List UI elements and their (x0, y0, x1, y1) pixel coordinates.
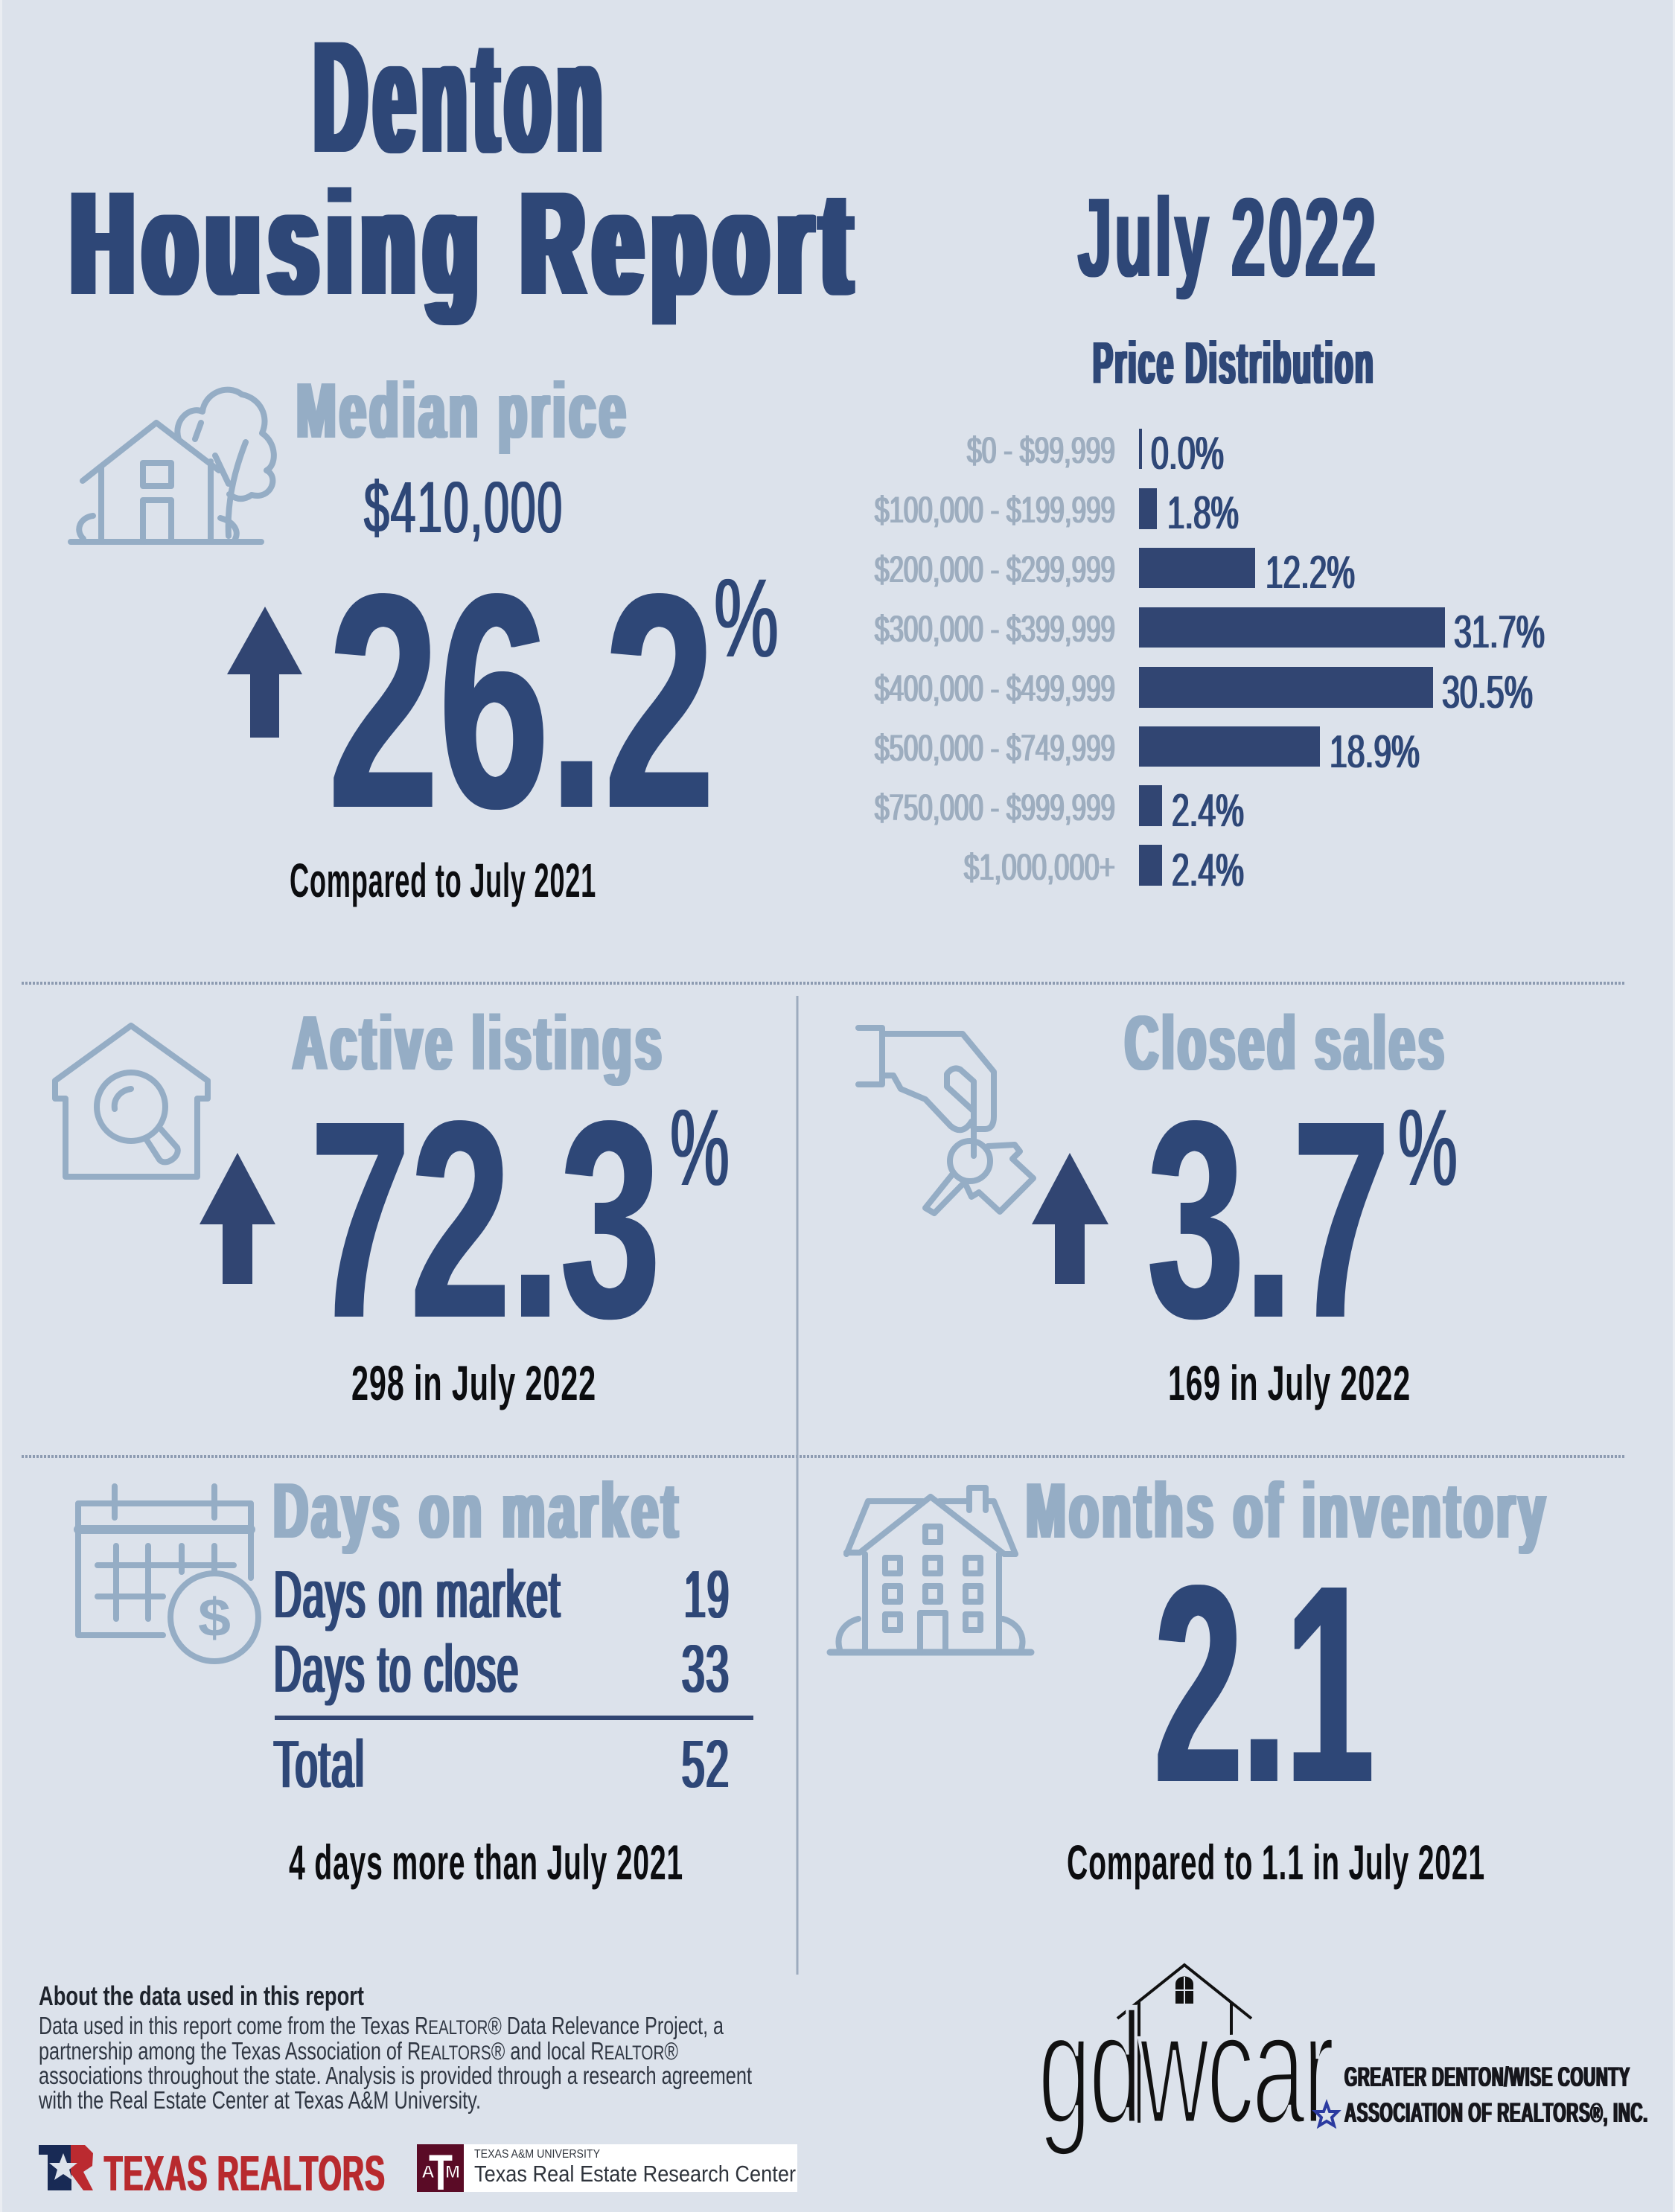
change value: 3.7 (1147, 1063, 1390, 1377)
inventory value: 2.1 (1155, 1527, 1374, 1841)
coin dollar sign: $ (198, 1588, 231, 1648)
change value: 72.3 (310, 1063, 660, 1377)
about the data note: Data used in this report come from the Texas REALTOR® Data Relevance Project, a (39, 2012, 724, 2039)
heading: Median price (296, 367, 629, 455)
bar chart: 31.7% (1454, 607, 1545, 658)
icon: star (1315, 2103, 1338, 2126)
logo window (1175, 1977, 1193, 2004)
logo: Texas A&M Real Estate Research Center: M (445, 2162, 460, 2182)
logo: Texas A&M Real Estate Research Center: T (429, 2144, 453, 2201)
icon: house with magnifier (55, 1026, 208, 1177)
about the data note: partnership among the Texas Association of REALTORS® and local REALTOR® (39, 2037, 678, 2065)
logo: Texas A&M Real Estate Research Center: TEXAS A&M UNIVERSITY (474, 2148, 600, 2161)
change value: 26.2 (328, 531, 715, 872)
icon: hand holding keys (858, 1028, 1033, 1213)
logo emblem (39, 2145, 93, 2190)
bar chart: $400,000 - $499,999 (875, 668, 1115, 709)
table: days: Total (274, 1727, 366, 1802)
percent sign: % (670, 1087, 730, 1208)
panel: days on market (78, 1467, 753, 1890)
median price value: $410,000 (364, 467, 564, 548)
bar chart: $100,000 - $199,999 (875, 489, 1115, 531)
bar chart: 0.0% (1151, 428, 1224, 479)
panel: closed sales (858, 1000, 1458, 1410)
table: days: Days to close (274, 1632, 520, 1707)
logo name: TEXAS REALTORS (104, 2146, 386, 2202)
logo: Texas A&M Real Estate Research Center (417, 2144, 797, 2201)
bar chart: 2.4% (1172, 845, 1244, 896)
listings count: 298 in July 2022 (351, 1355, 596, 1410)
chart heading: Price Distribution (1093, 330, 1375, 396)
logo wordmark: gdwcar (1038, 1978, 1333, 2158)
logo: Texas A&M Real Estate Research Center: A (421, 2162, 435, 2182)
association name (1344, 2062, 1648, 2128)
table: days: Days on market (274, 1558, 561, 1632)
heading: Active listings (293, 1000, 665, 1087)
comparison note: Compared to July 2021 (290, 854, 596, 907)
bar chart: 30.5% (1442, 667, 1533, 718)
bar chart: $200,000 - $299,999 (875, 549, 1115, 590)
report date: July 2022 (1078, 174, 1379, 300)
bar chart: 1.8% (1167, 488, 1239, 539)
title (71, 8, 861, 325)
title: Denton (314, 8, 609, 186)
table: days: 52 (682, 1727, 730, 1802)
table: days: 19 (684, 1558, 730, 1632)
panel: active listings (55, 1000, 730, 1410)
logo house outline (1117, 1965, 1251, 2123)
sales count: 169 in July 2022 (1168, 1355, 1411, 1410)
bar chart: 18.9% (1330, 726, 1420, 778)
about the data note: associations throughout the state. Analysis is provided through a research agreement (39, 2062, 752, 2089)
about the data note: with the Real Estate Center at Texas A&M University. (38, 2086, 481, 2114)
icon: multi-storey house (830, 1488, 1031, 1652)
icon: up arrow (227, 607, 302, 738)
bar chart: $0 - $99,999 (967, 429, 1115, 471)
heading: Closed sales (1125, 1000, 1447, 1087)
panel: months of inventory (830, 1467, 1548, 1890)
percent sign: % (1398, 1087, 1458, 1208)
title: Housing Report (71, 161, 861, 325)
bar chart: 12.2% (1266, 547, 1355, 598)
icon: calendar with dollar coin (78, 1486, 258, 1661)
logo: Texas A&M Real Estate Research Center: Texas Real Estate Research Center (474, 2161, 796, 2187)
about the data note: About the data used in this report (39, 1981, 364, 2011)
logo: Texas Realtors (39, 2145, 386, 2202)
heading: Days on market (273, 1467, 681, 1555)
table: days (274, 1558, 753, 1802)
icon: up arrow (1032, 1153, 1108, 1284)
panel: median price (71, 367, 779, 907)
icon: up arrow (200, 1153, 275, 1284)
about the data note (38, 1981, 752, 2114)
icon: house with tree (71, 390, 274, 542)
panel: price distribution (875, 330, 1545, 896)
bar chart (875, 428, 1545, 896)
comparison note: 4 days more than July 2021 (289, 1835, 683, 1890)
bar chart: $500,000 - $749,999 (875, 727, 1115, 769)
bar chart: 2.4% (1172, 785, 1244, 837)
bar chart: $750,000 - $999,999 (875, 787, 1115, 828)
logo: gdwcar (1038, 1965, 1648, 2158)
bar chart: $1,000,000+ (964, 846, 1115, 888)
table: days: 33 (682, 1632, 730, 1707)
bar chart: $300,000 - $399,999 (875, 608, 1115, 650)
percent sign: % (714, 555, 779, 680)
